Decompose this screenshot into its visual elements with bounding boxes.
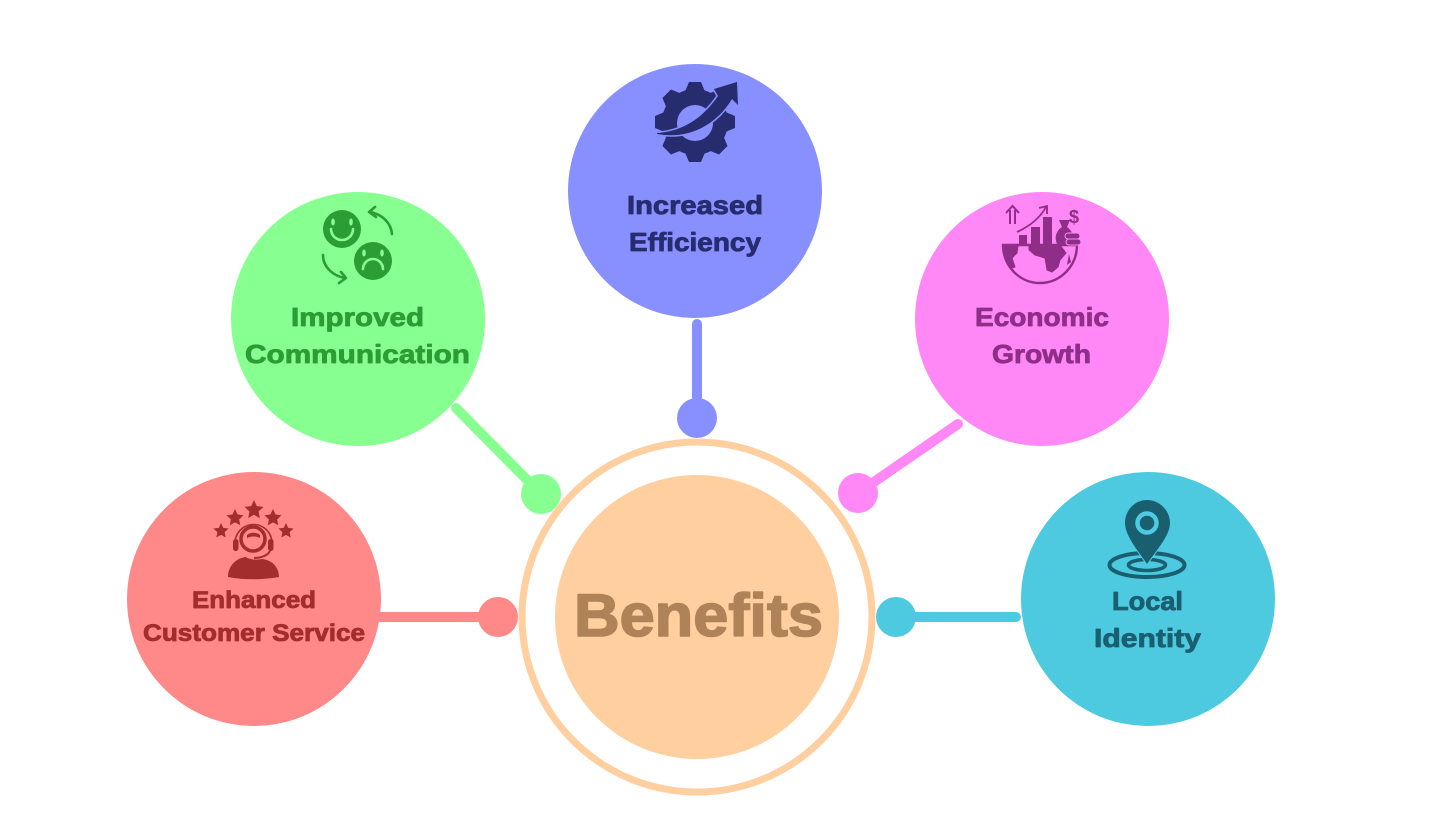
connector: Local Identity to hub [876, 597, 1016, 637]
connector: Economic Growth to hub [838, 424, 958, 513]
central hub: Benefits [522, 442, 872, 792]
icon: globe with growth chart and money [1003, 206, 1081, 283]
label: Improved Communication: Improved [291, 302, 424, 332]
label: Economic Growth: Economic [975, 302, 1109, 332]
icon: location pin on target rings [1110, 500, 1184, 577]
label: Local Identity: Local [1112, 586, 1183, 616]
label: Enhanced Customer Service: Enhanced [192, 587, 316, 614]
label: Improved Communication [245, 302, 470, 369]
panel: Improved Communication [231, 192, 485, 446]
icon: customer service agent with stars [213, 500, 294, 579]
central hub: Benefits: Benefits [574, 582, 823, 649]
panel: Increased Efficiency [568, 64, 822, 318]
icon: globe with growth chart and money: $ [1069, 207, 1079, 227]
connector: Enhanced Customer Service to hub [378, 597, 518, 637]
label: Local Identity: Identity [1094, 623, 1202, 653]
icon: happy and sad faces with arrows [323, 207, 392, 283]
label: Local Identity [1094, 586, 1202, 653]
panel: Economic Growth [915, 192, 1169, 446]
connector: Improved Communication to hub [456, 408, 561, 514]
label: Economic Growth: Growth [992, 339, 1091, 369]
label: Economic Growth [975, 302, 1109, 369]
label: Enhanced Customer Service: Customer Service [143, 620, 365, 647]
label: Improved Communication: Communication [245, 339, 470, 369]
label: Increased Efficiency: Efficiency [629, 227, 762, 257]
panel: Local Identity [1021, 472, 1275, 726]
label: Increased Efficiency [627, 190, 763, 257]
label: Increased Efficiency: Increased [627, 190, 763, 220]
label: Enhanced Customer Service [143, 587, 365, 647]
connector: Increased Efficiency to hub [677, 324, 717, 438]
icon: gear with rising arrow [655, 82, 738, 162]
panel: Enhanced Customer Service [127, 472, 381, 726]
